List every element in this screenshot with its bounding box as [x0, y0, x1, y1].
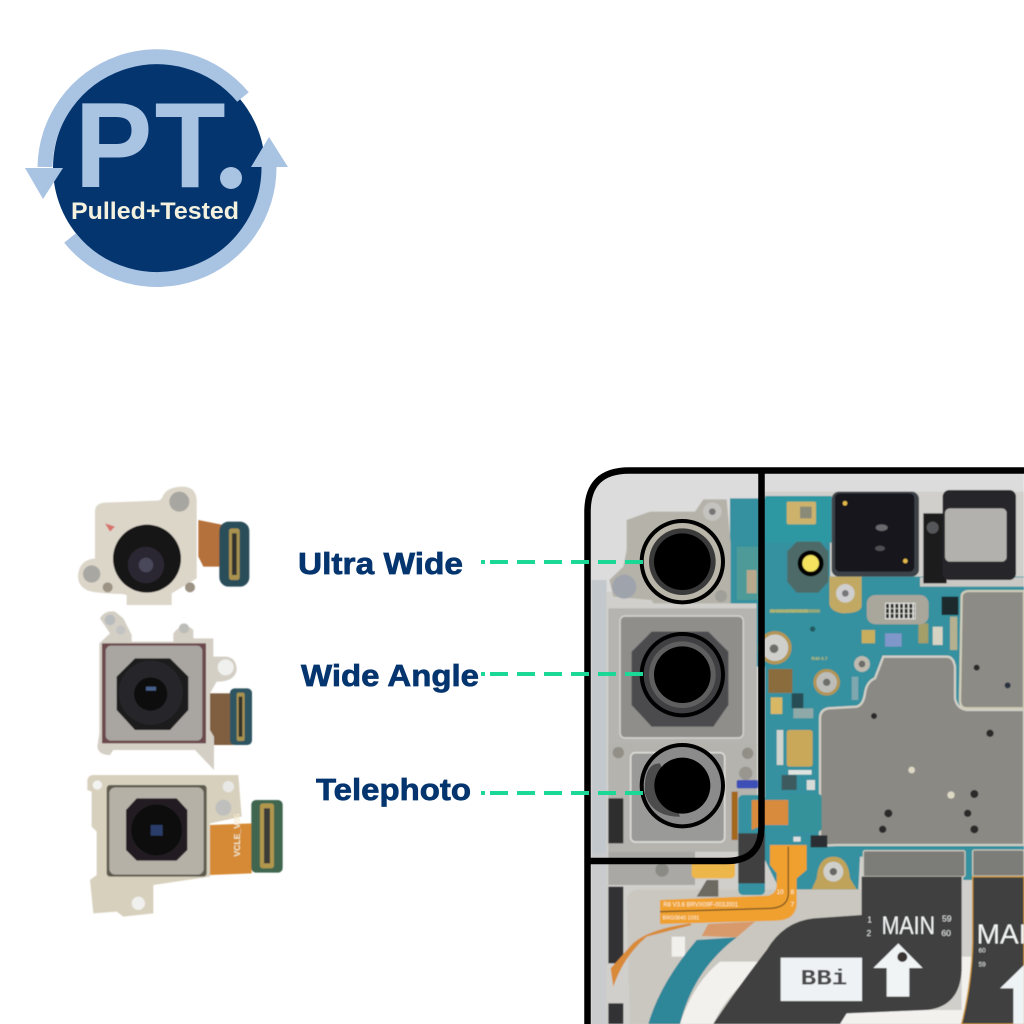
orange flex cable: R8 V3.6 BRVX09F-003J001	[663, 903, 739, 909]
main connector pads	[863, 850, 1024, 877]
MAIN flex cable: 2	[867, 929, 872, 938]
label: Wide Angle: Wide Angle	[301, 658, 479, 693]
orange flex cable: 7	[791, 902, 795, 909]
side rail parts	[608, 798, 623, 1024]
logo tagline: Pulled+Tested	[71, 198, 239, 225]
orange flex to teal chip	[732, 792, 827, 847]
icon: up arrow	[873, 943, 923, 997]
second MAIN flex cable	[962, 877, 1024, 1024]
lens: ultra wide	[642, 521, 723, 602]
second MAIN flex cable: 59	[979, 962, 986, 969]
masked lenses over photo	[642, 521, 723, 826]
lower photo section	[608, 730, 1024, 1024]
MAIN flex cable: 60	[941, 928, 951, 938]
ultra wide lens in phone	[609, 499, 731, 603]
board components	[737, 502, 1024, 718]
QR label	[829, 577, 929, 624]
orange flex cable: 10	[777, 889, 784, 896]
dashed leader: wide angle	[481, 672, 643, 676]
logo letter P: P	[74, 77, 152, 213]
teal ribbon	[648, 937, 737, 1024]
BBi label: BBi	[801, 967, 847, 992]
orange flex cable	[611, 845, 807, 987]
phone teardown photo	[587, 470, 1024, 1024]
blue ribbon and dark strip	[738, 795, 765, 895]
lens: telephoto	[642, 745, 723, 826]
RF shields	[820, 591, 1024, 846]
label: Telephoto: Telephoto	[316, 772, 471, 807]
phone frame metal	[587, 470, 1024, 1024]
MAIN flex cable	[713, 877, 962, 1024]
camera module: telephoto: VCLE_V05	[232, 813, 242, 857]
label: Ultra Wide: Ultra Wide	[298, 546, 463, 581]
camera module: wide angle	[97, 611, 252, 770]
logo letter T: T	[155, 77, 226, 213]
dashed leader: telephoto	[481, 791, 643, 795]
interior battery bay	[627, 889, 863, 1024]
orange flex cable: 8	[791, 889, 795, 896]
BBi label	[781, 958, 862, 1001]
MAIN flex cable: 1	[867, 916, 872, 925]
flash	[787, 542, 828, 593]
lens: wide angle	[642, 634, 723, 715]
gold chip and small parts	[777, 730, 815, 790]
MAIN flex cable: 59	[942, 913, 952, 923]
black highlight frame	[588, 470, 1024, 1024]
front camera sensor	[832, 492, 919, 577]
board components: R40 0.7	[811, 656, 828, 661]
dashed leader: ultra wide	[481, 560, 643, 564]
camera module: ultra wide	[78, 487, 249, 605]
board screws	[758, 631, 870, 696]
earpiece module	[923, 490, 1016, 583]
logo: PT Pulled+Tested badge	[25, 57, 288, 279]
board components: 28-S911E/B/S/G/E	[769, 609, 808, 614]
orange flex cable: BRG0840 1091	[663, 915, 699, 921]
MAIN flex cable: MAIN	[882, 913, 935, 940]
main circuit board	[730, 498, 1024, 890]
wide angle lens in phone	[608, 608, 757, 810]
telephoto bracket	[608, 743, 758, 885]
board screw and bracket	[812, 857, 857, 889]
camera module: telephoto	[87, 775, 283, 917]
second MAIN flex cable: 60	[979, 948, 986, 955]
